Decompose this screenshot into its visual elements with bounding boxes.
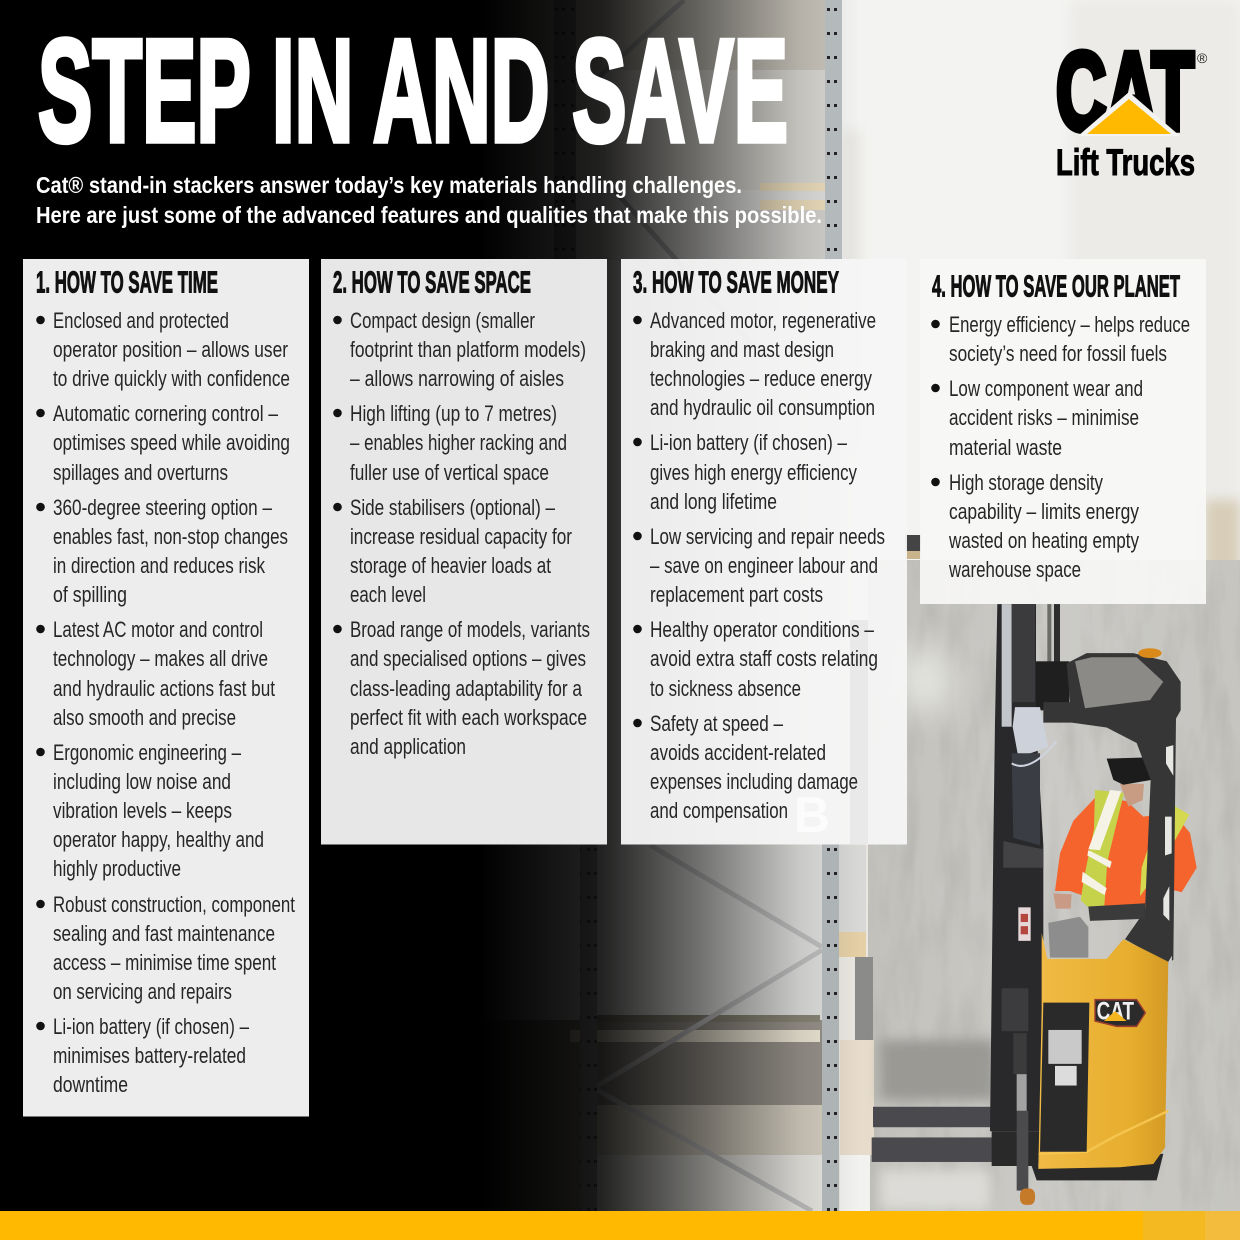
bullet: high storage density: capability – limits energy <box>949 499 1139 524</box>
bullet: broad range <box>333 617 590 759</box>
hydraulic unit and stabiliser wheel <box>1002 988 1035 1205</box>
bullet: li-ion battery: minimises battery-related <box>53 1043 246 1068</box>
bullet: high lifting: High lifting (up to 7 metres) <box>350 401 557 426</box>
bullet: energy efficiency: society’s need for fossil fuels <box>949 341 1167 366</box>
bullet: low servicing: replacement part costs <box>650 582 823 607</box>
bullet: cornering control: optimises speed while avoiding <box>53 430 290 455</box>
bullet: low servicing <box>633 524 885 607</box>
bullet: compact design <box>333 308 586 391</box>
overhead guard <box>1043 648 1181 964</box>
bullet: ergonomic engineering: operator happy, healthy and <box>53 827 264 852</box>
bullet: AC motor: Latest AC motor and control <box>53 617 263 642</box>
chassis base <box>992 1131 1163 1180</box>
stand-in stacker forklift with operator <box>872 604 1197 1205</box>
bullet: side stabilisers: increase residual capacity for <box>350 524 572 549</box>
bullet: li-ion battery <box>633 430 857 514</box>
bullet: AC motor: technology – makes all drive <box>53 646 268 671</box>
bullet: compact design: footprint than platform models) <box>350 337 586 362</box>
bullet: 360-degree steering: of spilling <box>53 582 127 607</box>
yellow truck body <box>1038 933 1168 1169</box>
bullet: low component wear: material waste <box>949 435 1062 460</box>
bullet: low component wear: Low component wear and <box>949 376 1143 401</box>
bullet: broad range: class-leading adaptability for a <box>350 676 583 701</box>
bullet: low component wear <box>931 376 1143 460</box>
bullet: advanced motor: and hydraulic oil consumption <box>650 395 875 420</box>
bullet: li-ion battery: gives high energy efficiency <box>650 460 857 485</box>
subtitle: Here are just some of the advanced features and qualities that make this possible. <box>36 202 822 228</box>
bullet: high storage density: High storage density <box>949 470 1103 495</box>
bullet: healthy operator: to sickness absence <box>650 676 801 701</box>
subtitle: Cat® stand-in stackers answer today’s key materials handling challenges. <box>36 172 742 198</box>
bullet: 360-degree steering: 360-degree steering option – <box>53 495 273 520</box>
diagonal braces <box>590 0 764 358</box>
bullet: robust construction: Robust construction, component <box>53 892 295 917</box>
bullet: li-ion battery <box>36 1014 250 1097</box>
bullet: robust construction <box>36 892 295 1004</box>
bullet: broad range: perfect fit with each workspace <box>350 705 587 730</box>
CAT badge on truck: CAT <box>1097 996 1134 1025</box>
armrest and console <box>1048 903 1145 958</box>
bullet: li-ion battery: and long lifetime <box>650 489 777 514</box>
panel 2: how to save space <box>321 259 607 844</box>
bullet: AC motor: and hydraulic actions fast but <box>53 676 275 701</box>
bullet: enclosed position: to drive quickly with confidence <box>53 366 290 391</box>
bullet: safety at speed: Safety at speed – <box>650 711 784 736</box>
panel 4: how to save our planet <box>920 259 1206 604</box>
bullet: AC motor: also smooth and precise <box>53 705 236 730</box>
bullet: ergonomic engineering: vibration levels – keeps <box>53 798 232 823</box>
panel 1: how to save time <box>23 259 309 1116</box>
heading 1: 1. HOW TO SAVE TIME <box>36 264 218 300</box>
bullet: safety at speed: expenses including damage <box>650 769 858 794</box>
bullet: broad range: Broad range of models, variants <box>350 617 590 642</box>
bullet: advanced motor: Advanced motor, regenerative <box>650 308 876 333</box>
bullet: ergonomic engineering: including low noise and <box>53 769 231 794</box>
bullet: high storage density: warehouse space <box>948 557 1081 582</box>
bullet: safety at speed: avoids accident-related <box>650 740 826 765</box>
bullet: cornering control: Automatic cornering control – <box>53 401 279 426</box>
bullet: robust construction: on servicing and repairs <box>53 979 232 1004</box>
bullet: healthy operator: avoid extra staff costs relating <box>650 646 878 671</box>
bullet: side stabilisers <box>333 495 572 607</box>
bullet: li-ion battery: Li-ion battery (if chosen) – <box>53 1014 250 1039</box>
bullet: high storage density <box>931 470 1139 582</box>
bullet: advanced motor: braking and mast design <box>650 337 834 362</box>
bullet: safety at speed <box>633 711 858 823</box>
bullet: AC motor <box>36 617 275 730</box>
bullet: ergonomic engineering <box>36 740 264 881</box>
panel 3: how to save money <box>621 259 907 844</box>
bullet: high lifting <box>333 401 567 485</box>
bullet: side stabilisers: storage of heavier loads at <box>350 553 551 578</box>
bullet: enclosed position: operator position – allows user <box>53 337 288 362</box>
bullet: li-ion battery: downtime <box>53 1072 128 1097</box>
bullet: 360-degree steering: in direction and reduces risk <box>53 553 266 578</box>
bullet: ergonomic engineering: Ergonomic engineering – <box>53 740 242 765</box>
faint watermark letter: B <box>794 787 830 843</box>
bullet: low servicing: Low servicing and repair needs <box>650 524 885 549</box>
bullet: low component wear: accident risks – minimise <box>949 405 1139 430</box>
bullet: compact design: Compact design (smaller <box>350 308 535 333</box>
bullet: high storage density: wasted on heating empty <box>948 528 1139 553</box>
bullet: enclosed position <box>36 308 290 391</box>
bullet: energy efficiency <box>931 312 1190 366</box>
heading 3: 3. HOW TO SAVE MONEY <box>633 264 839 300</box>
battery compartment with labels <box>1040 1003 1089 1152</box>
bullet: robust construction: access – minimise time spent <box>53 950 276 975</box>
footer bar <box>0 1211 1240 1240</box>
subtitle <box>36 172 822 228</box>
CAT Lift Trucks logo <box>1056 30 1208 183</box>
bullet: healthy operator: Healthy operator conditions – <box>650 617 875 642</box>
bullet: side stabilisers: Side stabilisers (optional) – <box>350 495 556 520</box>
bullet: advanced motor <box>633 308 876 420</box>
bullet: cornering control <box>36 401 290 485</box>
mast <box>990 604 1069 1131</box>
bullet: high lifting: fuller use of vertical space <box>350 460 549 485</box>
bullet: 360-degree steering: enables fast, non-stop changes <box>53 524 288 549</box>
CAT Lift Trucks logo: Lift Trucks <box>1056 142 1195 183</box>
bullet: li-ion battery: Li-ion battery (if chosen) – <box>650 430 848 455</box>
bullet: cornering control: spillages and overturns <box>53 460 228 485</box>
CAT Lift Trucks logo: ® <box>1197 50 1208 66</box>
bullet: compact design: – allows narrowing of aisles <box>350 366 564 391</box>
bullet: broad range: and specialised options – gives <box>350 646 586 671</box>
bullet: high lifting: – enables higher racking and <box>350 430 567 455</box>
bullet: broad range: and application <box>350 734 466 759</box>
bullet: advanced motor: technologies – reduce energy <box>650 366 872 391</box>
bullet: low servicing: – save on engineer labour and <box>650 553 878 578</box>
operator <box>1053 755 1197 921</box>
forks <box>872 1107 995 1162</box>
bullet: robust construction: sealing and fast maintenance <box>53 921 275 946</box>
bullet: healthy operator <box>633 617 878 701</box>
bullet: 360-degree steering <box>36 495 288 607</box>
bullet: side stabilisers: each level <box>350 582 426 607</box>
bullet: ergonomic engineering: highly productive <box>53 856 181 881</box>
heading 2: 2. HOW TO SAVE SPACE <box>333 264 531 300</box>
bullet: safety at speed: and compensation <box>650 798 788 823</box>
bullet: enclosed position: Enclosed and protected <box>53 308 229 333</box>
